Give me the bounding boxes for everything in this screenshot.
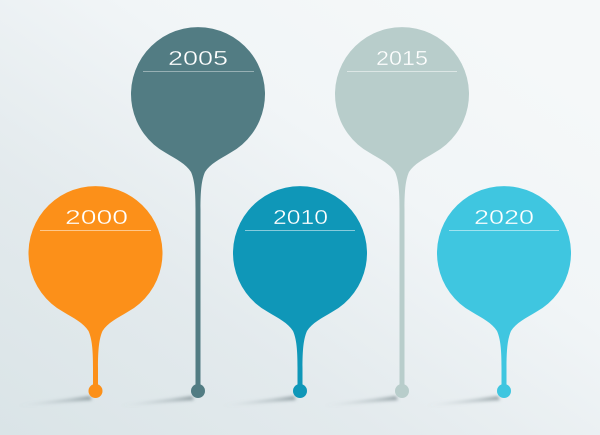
year label: 2010: 2010 [273,207,328,229]
year label: 2000: 2000 [65,207,128,229]
year label: 2005: 2005 [168,48,228,70]
pin: 2005 [131,27,265,398]
year label: 2015: 2015 [376,48,428,70]
pin: 2020 [437,186,571,398]
pin: 2000 [28,186,162,398]
pin: 2010 [233,186,367,398]
pin: 2015 [335,27,469,398]
year label: 2020: 2020 [474,207,534,229]
shadows under timeline dots [15,396,500,406]
